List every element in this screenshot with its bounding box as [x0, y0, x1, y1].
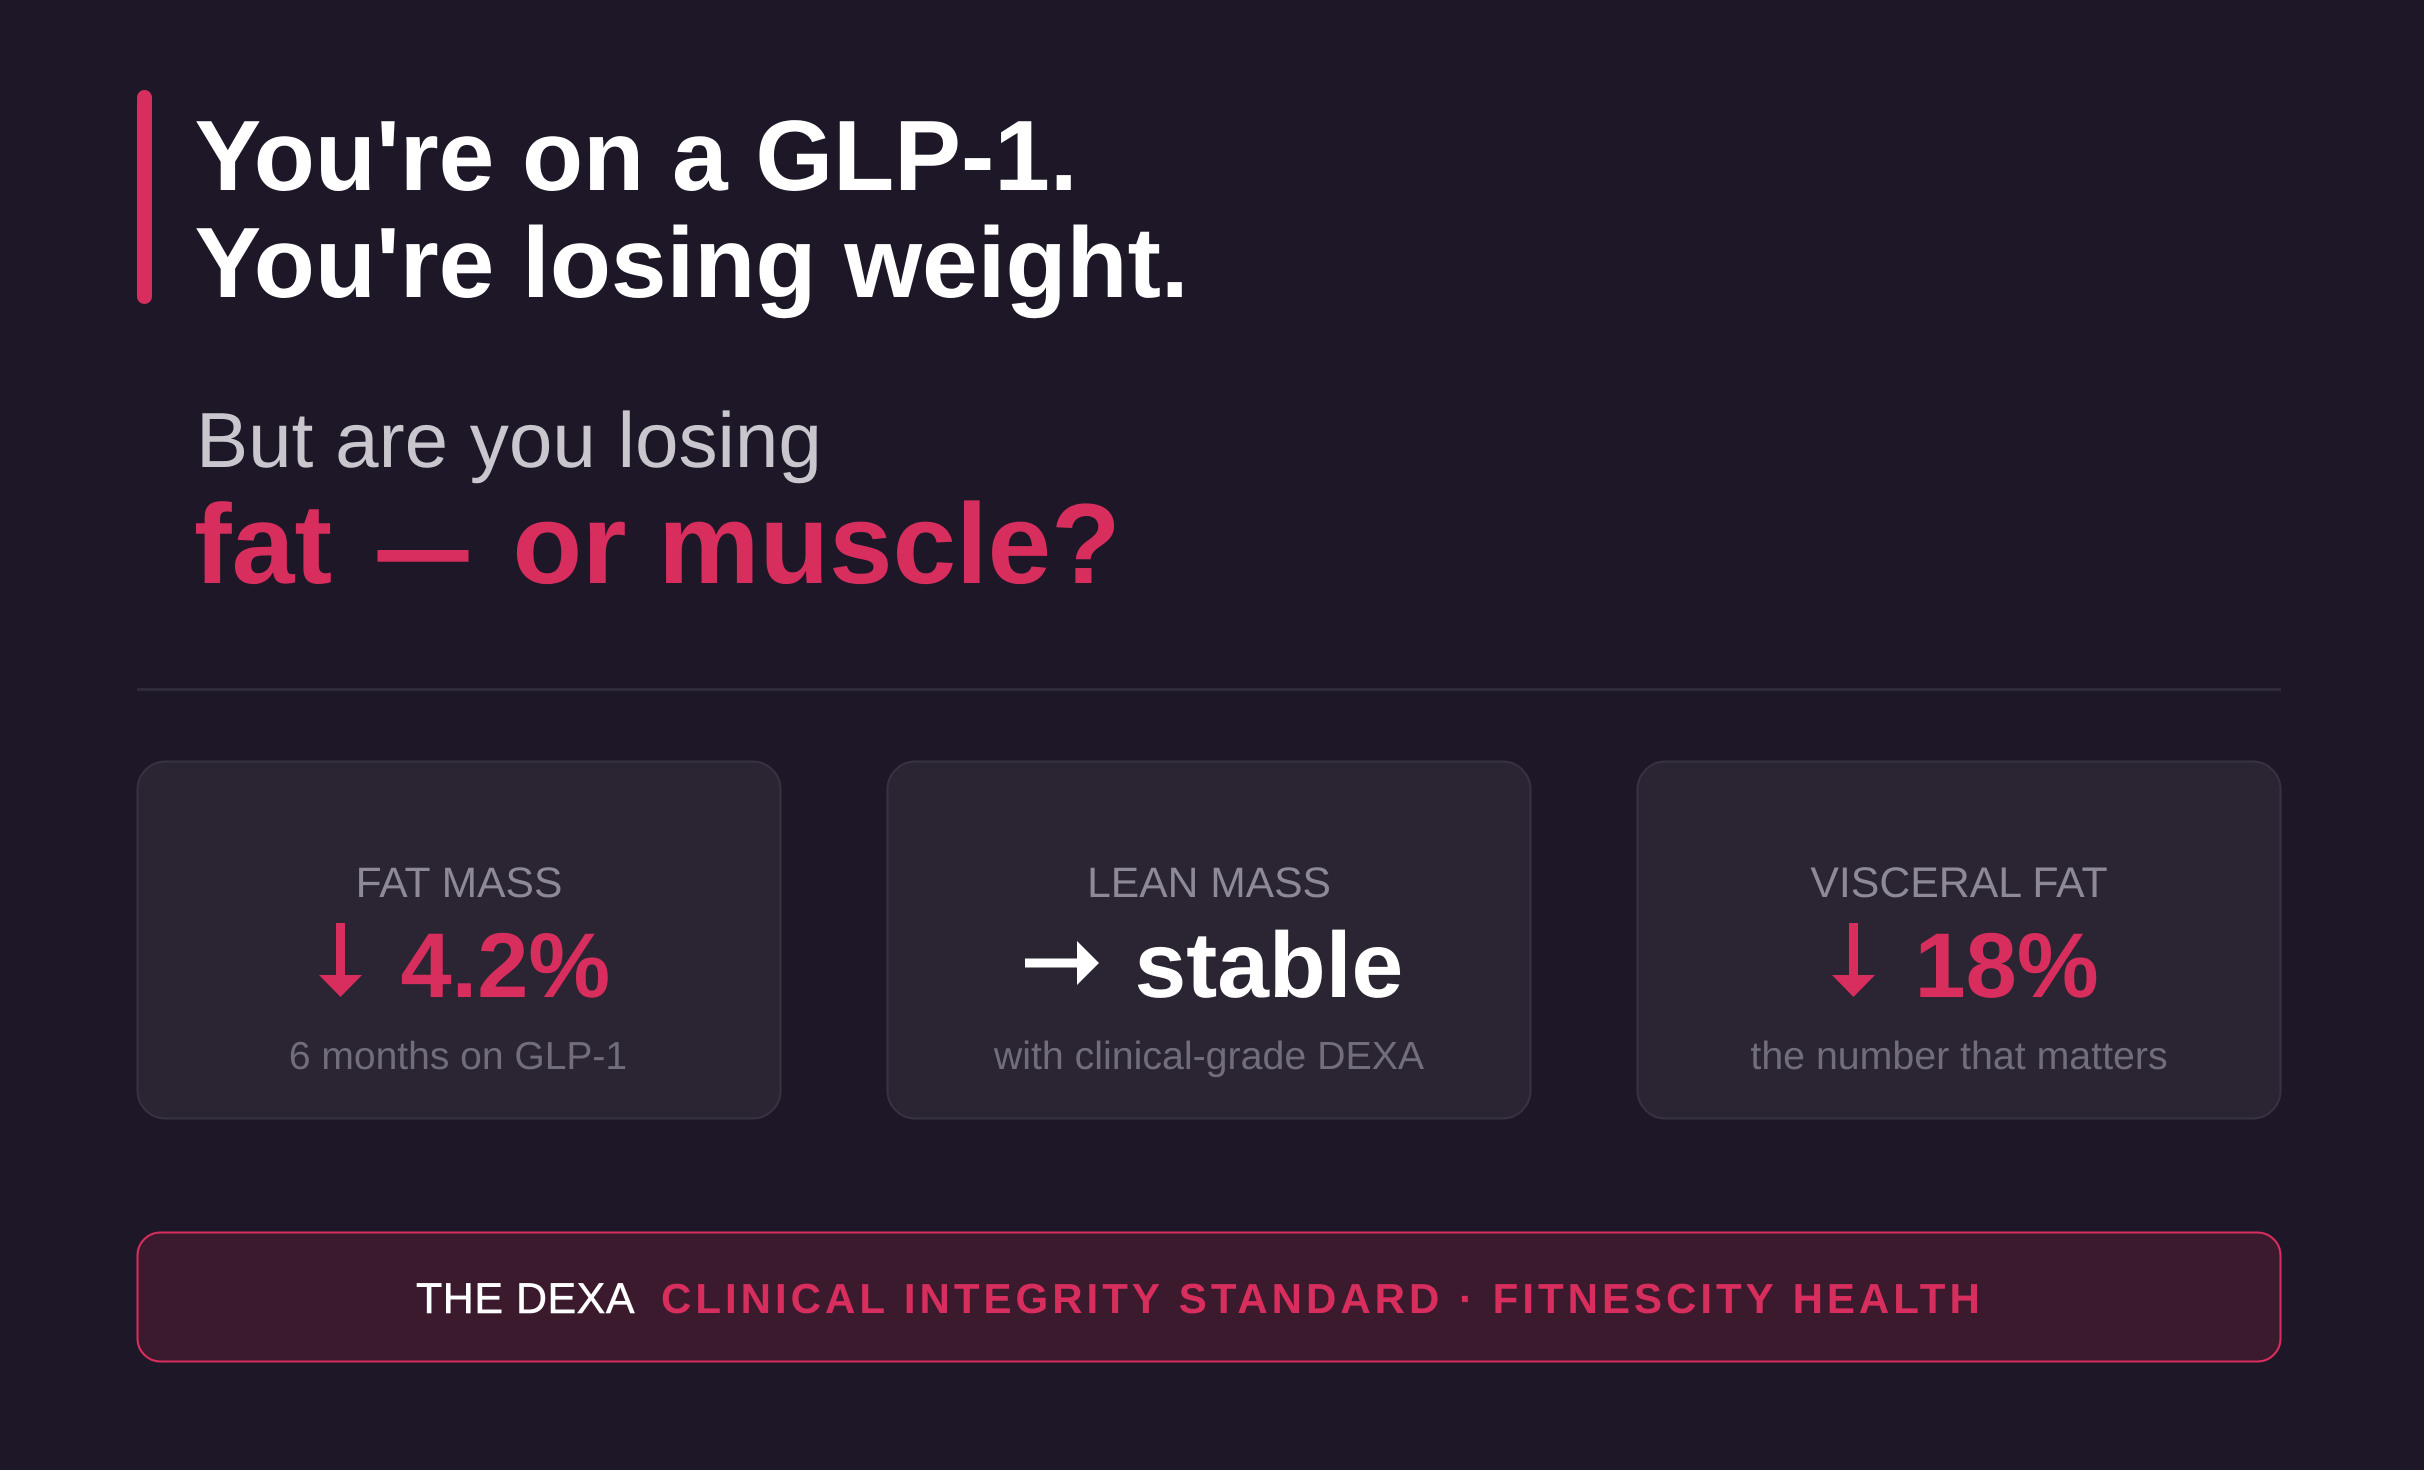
panel: lean mass: [888, 762, 1530, 1118]
panel: visceral fat: the number that matters: [1750, 1034, 2168, 1078]
title: You're on a GLP-1.: [194, 100, 1078, 212]
panel: fat mass: FAT MASS: [356, 859, 562, 907]
subtitle question: —: [379, 500, 467, 598]
subtitle question: But are you losing: [196, 396, 822, 484]
panel: fat mass: 6 months on GLP-1: [289, 1035, 627, 1078]
panel: visceral fat: 18%: [1914, 915, 2099, 1017]
footer banner: [138, 1232, 2280, 1362]
panel: lean mass: LEAN MASS: [1087, 859, 1331, 907]
panel: lean mass: stable: [1134, 913, 1403, 1017]
footer banner: CLINICAL INTEGRITY STANDARD · FITNESCITY HEALTH: [661, 1275, 1984, 1322]
footer banner: THE DEXA: [416, 1275, 635, 1323]
subtitle question: fat: [194, 481, 332, 607]
subtitle question: or muscle?: [512, 481, 1121, 608]
panel: fat mass: [138, 762, 780, 1118]
accent bar: [137, 90, 152, 304]
panel: visceral fat: [1638, 762, 2280, 1118]
panel: fat mass: 4.2%: [400, 915, 610, 1017]
icon: down arrow: [319, 923, 362, 997]
panel: visceral fat: VISCERAL FAT: [1810, 859, 2108, 907]
icon: down arrow: [1832, 923, 1875, 997]
title: You're losing weight.: [194, 207, 1189, 319]
subtitle question: [194, 396, 1121, 608]
panel: lean mass: with clinical-grade DEXA: [993, 1034, 1425, 1078]
title: [194, 100, 1189, 319]
icon: right arrow: [1025, 941, 1099, 985]
